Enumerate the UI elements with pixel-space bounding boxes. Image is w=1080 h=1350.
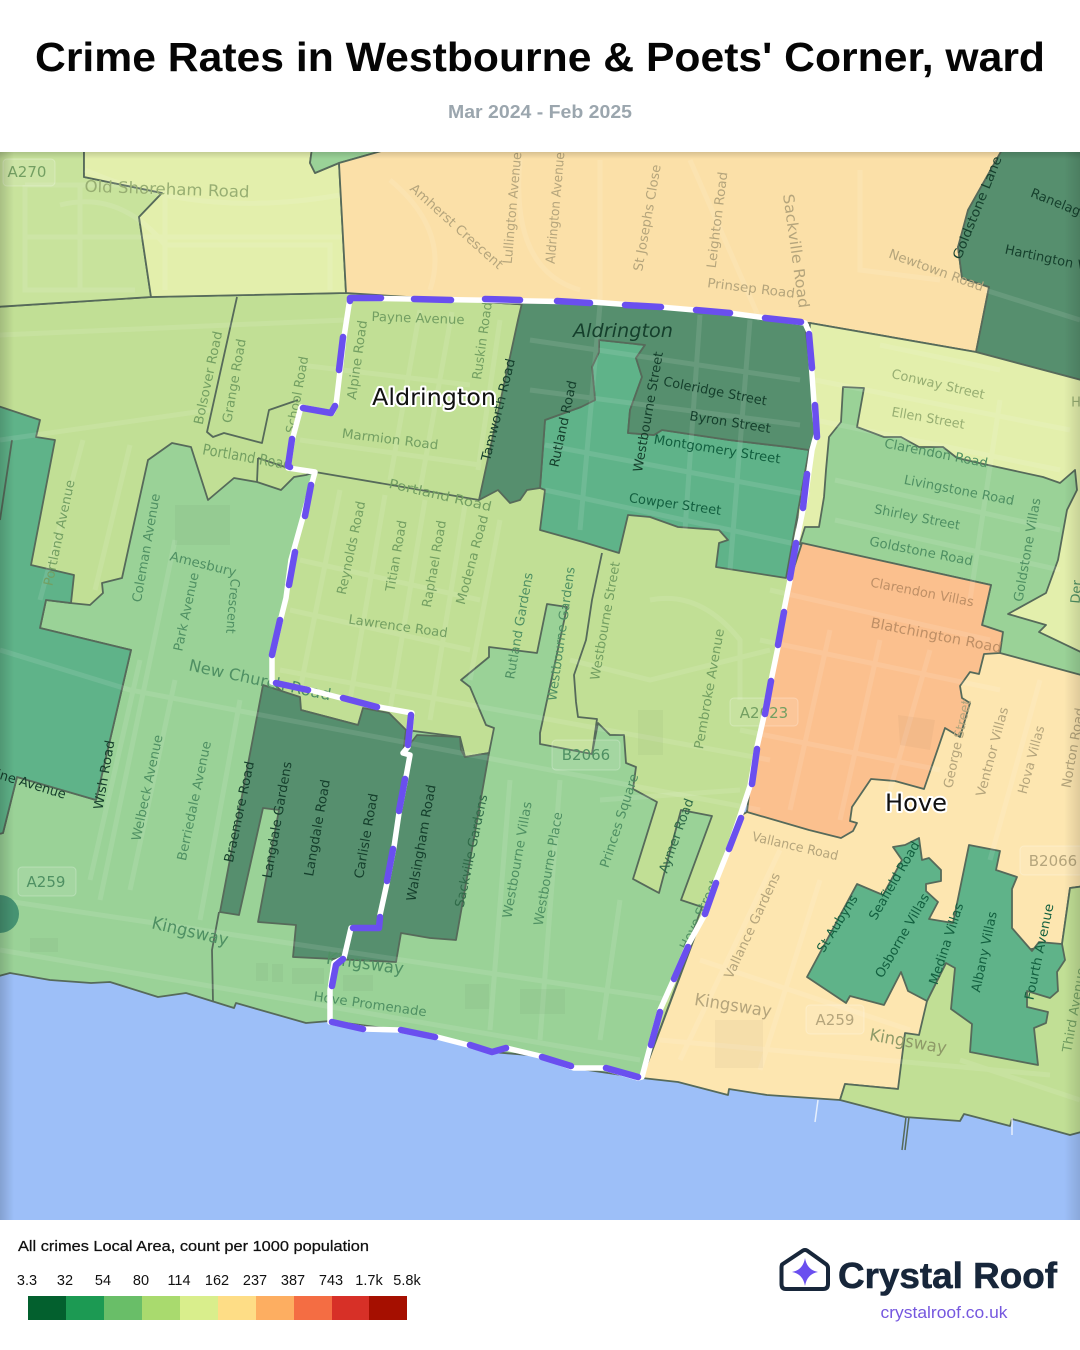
street labels: Seafield Road: [867, 839, 923, 923]
street labels: Langdale Road: [302, 778, 334, 878]
road number shields: A270: [8, 163, 46, 181]
street labels: Clarendon Road: [883, 437, 989, 471]
street labels: Amesbury: [168, 549, 238, 581]
street labels: Vallance Road: [750, 830, 840, 864]
street labels: Ventnor Villas: [974, 705, 1012, 798]
street labels: Grange Road: [220, 338, 250, 424]
street labels: Lullington Avenue: [501, 152, 525, 264]
street labels: Portland Road: [201, 440, 293, 474]
street labels: Pembroke Avenue: [692, 628, 728, 750]
legend scale values: 3.3: [17, 1273, 37, 1289]
area: top-left green: [0, 148, 162, 307]
street labels: Leighton Road: [705, 171, 731, 269]
street labels: Princes Square: [598, 772, 642, 870]
street labels: Kingsway: [150, 913, 230, 951]
street labels: Park Avenue: [171, 571, 203, 653]
street labels: Payne Avenue: [371, 310, 465, 328]
street labels: Blatchington Road: [869, 615, 1003, 657]
road number shields: A259: [816, 1011, 854, 1029]
website url: crystalroof.co.uk: [880, 1304, 1008, 1322]
street labels: Coleman Avenue: [130, 493, 164, 603]
area: south-east light green: [840, 886, 1080, 1135]
area: northern ward dark green: [479, 302, 817, 503]
legend colour bar: [28, 1296, 407, 1320]
place label: Hove: Hove: [885, 789, 947, 817]
street labels: School Road: [284, 355, 312, 435]
street labels: Lawrence Road: [347, 613, 449, 641]
road number shields: [3, 159, 1080, 1034]
street labels: Livingstone Road: [903, 473, 1015, 509]
street labels: Rutland Gardens: [503, 571, 537, 680]
logo: Crystal Roof: [782, 1250, 1058, 1322]
road number shields: B2066: [1029, 852, 1077, 870]
legend scale values: 387: [281, 1273, 305, 1289]
street labels: Westbourne Gardens: [545, 566, 579, 702]
street labels: Kingsway: [693, 990, 773, 1022]
street labels: Westbourne Street: [588, 561, 624, 681]
street labels: Coleridge Street: [662, 375, 768, 409]
street labels: Amherst Crescent: [406, 181, 506, 273]
legend scale values: 114: [167, 1273, 191, 1289]
legend scale values: 80: [133, 1273, 149, 1289]
street labels: Alpine Road: [345, 319, 371, 401]
street labels: Newtown Road: [886, 247, 986, 295]
legend: [17, 1239, 421, 1320]
street labels: Kingsway: [325, 949, 405, 979]
road number shields: A259: [27, 873, 65, 891]
legend scale values: 54: [95, 1273, 111, 1289]
street labels: Shirley Street: [873, 502, 961, 534]
pier and groynes: [815, 1100, 1012, 1150]
street labels: Portland Avenue: [41, 479, 79, 587]
street labels: Kingsway: [868, 1025, 948, 1059]
street labels: Modena Road: [454, 514, 492, 606]
subtitle: date range: Mar 2024 - Feb 2025: [448, 102, 632, 122]
street labels: Fourth Avenue: [1022, 903, 1058, 1001]
road number shields: A2023: [740, 704, 788, 722]
area boundary lines: [0, 297, 602, 1002]
area: east medium green Goldstone: [800, 387, 1080, 676]
street labels: Aldrington: [571, 320, 673, 342]
street labels: George Street: [941, 698, 975, 790]
title: Crime Rates in Westbourne & Poets' Corner, ward: [35, 34, 1045, 80]
street labels: Goldstone Villas: [1011, 497, 1045, 603]
street labels: Ellen Street: [890, 405, 966, 433]
street labels: Bolsover Road: [192, 330, 226, 426]
legend scale values: 743: [319, 1273, 343, 1289]
street labels: Carlisle Road: [352, 792, 382, 880]
street labels: St Josephs Close: [631, 164, 665, 272]
street labels: Hova Villas: [1016, 724, 1048, 796]
area: deep orange: [747, 543, 1003, 838]
area: central mid green: [540, 340, 809, 578]
faint street network: [0, 160, 1080, 1100]
street labels: Crescent: [222, 578, 242, 634]
area: western and southern medium green: [0, 443, 712, 1078]
street labels: Titian Road: [383, 519, 411, 594]
street labels: Marmion Road: [341, 427, 439, 453]
street labels: Cowper Street: [628, 491, 722, 519]
area: south-east cream: [642, 640, 1080, 1100]
street labels: Goldstone Road: [868, 535, 974, 569]
street labels: Westbourne Place: [532, 811, 566, 927]
area: north-east dark green: [958, 148, 1080, 381]
area: western mid green: [0, 405, 131, 835]
street labels: Tamworth Road: [479, 357, 519, 464]
area: light green base: [0, 293, 810, 1078]
logo wordmark: Crystal Roof: [838, 1255, 1058, 1296]
locator dot at left edge: [0, 895, 19, 933]
street labels: Welbeck Avenue: [129, 734, 167, 842]
legend scale values: [17, 1273, 421, 1289]
street labels: Braemore Road: [222, 760, 258, 864]
street labels: Hove Promenade: [313, 990, 427, 1020]
legend scale values: 1.7k: [355, 1273, 383, 1289]
street labels: Clarendon Villas: [869, 576, 975, 610]
area: small medium green at top: [309, 152, 374, 174]
street labels: Osborne Villas: [873, 891, 933, 981]
street labels: Wish Road: [92, 739, 118, 811]
area: southern ward dark green: [220, 685, 489, 962]
street labels: Langdale Gardens: [260, 760, 296, 879]
street labels: Hove Street: [677, 878, 723, 952]
street labels: Sackville Gardens: [453, 793, 491, 909]
legend scale values: 5.8k: [393, 1273, 421, 1289]
place label: Aldrington: Aldrington: [372, 385, 496, 411]
legend scale values: 162: [205, 1273, 229, 1289]
street labels: Goldstone Lane: [950, 154, 1006, 262]
buildings and landmarks: [30, 505, 935, 1068]
sea: [0, 545, 1080, 1220]
street labels: Westbourne Street: [631, 351, 667, 473]
street labels: Old Shoreham Road: [84, 177, 250, 201]
icon: house with purple star: [782, 1250, 828, 1289]
map edge shading: [0, 152, 1080, 1220]
legend scale values: 32: [57, 1273, 73, 1289]
area: top-centre yellow green: [84, 148, 346, 297]
street labels: Walsingham Road: [404, 784, 440, 902]
street labels: Ruskin Road: [470, 301, 496, 381]
street labels: Prinsep Road: [706, 276, 796, 302]
street labels: Rutland Road: [548, 379, 580, 469]
street labels: Portland Road: [387, 477, 493, 515]
street labels: Medina Villas: [927, 901, 967, 987]
street labels: New Church Road: [187, 656, 333, 704]
area: north cream: [339, 148, 1003, 352]
street labels: Aldrington Avenue: [544, 152, 568, 264]
street labels: Sackville Road: [779, 193, 813, 309]
street labels: Byron Street: [688, 409, 772, 437]
street labels: Vallance Gardens: [722, 871, 784, 981]
road number shields: B2066: [562, 746, 610, 764]
street labels: Albany Villas: [969, 910, 1001, 994]
street labels: Berriedale Avenue: [175, 740, 215, 862]
street labels: [0, 152, 1080, 1059]
street labels: Raphael Road: [420, 519, 450, 609]
street labels: Conway Street: [890, 367, 986, 403]
ward boundary: dashed purple and white line: [272, 298, 817, 1078]
street labels: St Aubyns: [814, 892, 862, 956]
panel: choropleth map: [0, 148, 1080, 1220]
street labels: Westbourne Villas: [500, 800, 536, 919]
street labels: Aymer Road: [657, 797, 697, 875]
area: east yellow green: [796, 323, 1080, 660]
street labels: Reynolds Road: [335, 500, 369, 596]
area: Hove mid green: [807, 838, 1065, 1065]
legend scale values: 237: [243, 1273, 267, 1289]
legend title: All crimes Local Area, count per 1000 population: [18, 1239, 369, 1255]
street labels: Montgomery Street: [653, 433, 781, 467]
